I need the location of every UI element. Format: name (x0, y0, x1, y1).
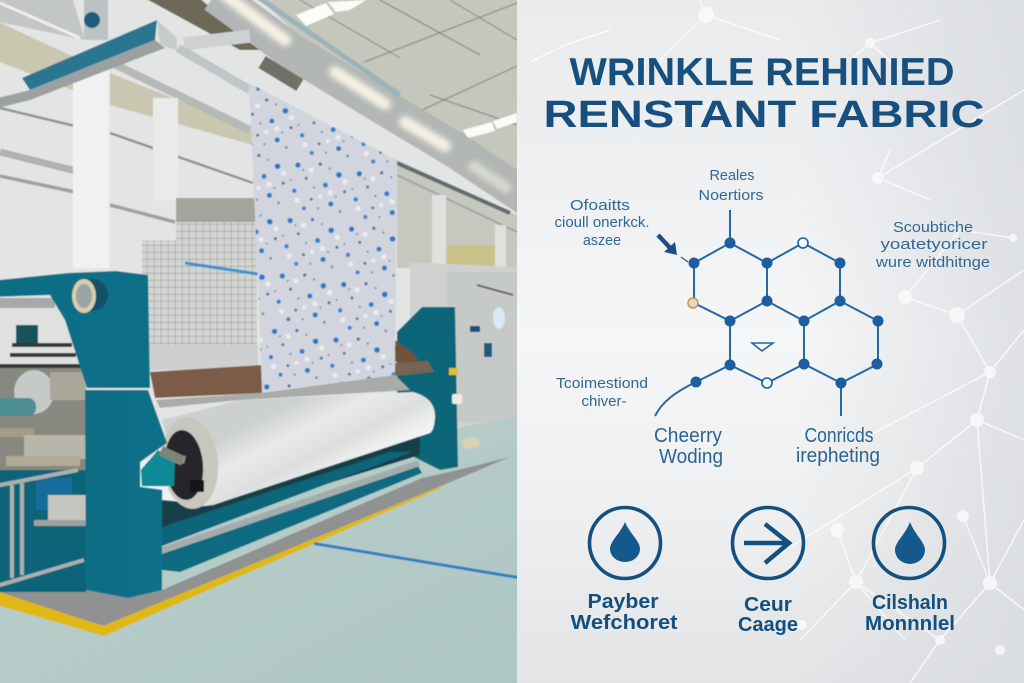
hanging printed fabric (249, 83, 397, 392)
blue floor line (314, 542, 530, 581)
beige beams (0, 18, 253, 145)
teal machine upper arm (0, 271, 150, 388)
label: bottom left of diagram: Woding (659, 446, 723, 468)
label: lower left: chiver- (582, 393, 626, 410)
label: bottom left of diagram: Cheerry (654, 425, 722, 447)
label: top: Noertiors (698, 187, 764, 204)
open nodes (762, 238, 808, 388)
teal machine pillar (85, 390, 167, 598)
title: WRINKLE REHINIED (570, 51, 954, 94)
frame controls (449, 368, 480, 449)
wall beams and pipes (0, 62, 253, 222)
floor (0, 415, 530, 683)
caption: third icon (865, 591, 955, 635)
label: top (698, 167, 764, 204)
label: bottom right of diagram (796, 425, 880, 467)
caption: third icon: Cilshaln (872, 591, 948, 614)
label: upper left: aszee (583, 232, 621, 249)
caption: second icon: Caage (738, 613, 798, 636)
grey control cabinet (410, 262, 517, 427)
roll axle clamp (141, 446, 185, 486)
label: top: Reales (710, 167, 754, 184)
caption: second icon (738, 593, 798, 636)
yellow floor line (0, 486, 441, 636)
label: upper right: wure witdhitnge (875, 254, 990, 271)
label: lower left (556, 375, 648, 410)
label: bottom right of diagram: irepheting (796, 445, 880, 467)
caption: second icon: Ceur (744, 593, 792, 616)
left machinery (0, 297, 86, 592)
title: RENSTANT FABRIC (544, 94, 984, 136)
label: bottom right of diagram: Conricds (804, 425, 874, 447)
caption: first icon (570, 590, 678, 634)
label: upper left (554, 197, 650, 249)
factory wall (0, 0, 530, 460)
upper left pipes and dark soffit (0, 0, 260, 50)
title (544, 51, 984, 136)
dark gap under roll (161, 436, 420, 528)
label: lower left: Tcoimestiond (556, 375, 648, 392)
background behind fabric right side (396, 160, 517, 268)
caption: first icon: Payber (588, 590, 659, 613)
node dots (688, 238, 884, 388)
highlighted node (688, 298, 698, 308)
centre triangle (752, 343, 773, 351)
hexagon molecular network diagram (655, 210, 884, 416)
grey machine base (0, 457, 510, 626)
silver ventilation duct (184, 0, 530, 200)
label: upper right (875, 219, 990, 271)
ceiling lights and seams (296, 0, 517, 138)
label: upper right: yoatetyoricer (880, 236, 988, 253)
caption: first icon: Wefchoret (570, 611, 678, 634)
arrow: pointer to molecule (658, 235, 688, 262)
icon: water drop 2 (874, 508, 944, 578)
gauge wheel (72, 279, 108, 313)
wire mesh cage (140, 198, 258, 370)
front rail (162, 452, 422, 572)
caption: third icon: Monnnlel (865, 612, 955, 635)
ceiling fabric rail (0, 0, 250, 110)
right machine frame (397, 307, 458, 470)
icon: arrow (732, 508, 804, 578)
panel: information background (517, 0, 1024, 683)
white columns (73, 70, 506, 270)
label: upper left: cioull onerkck. (554, 214, 650, 231)
ceiling (266, 0, 517, 170)
rear brown roller (150, 340, 434, 408)
label: bottom left of diagram (654, 425, 723, 468)
white fabric roll (158, 392, 435, 511)
panel: factory photo (0, 0, 530, 683)
bonds (655, 210, 878, 416)
label: upper right: Scoubtiche (893, 219, 973, 236)
label: upper left: Ofoaitts (570, 197, 630, 214)
background network lines (530, 0, 1024, 683)
icon: water drop 1 (590, 508, 660, 578)
